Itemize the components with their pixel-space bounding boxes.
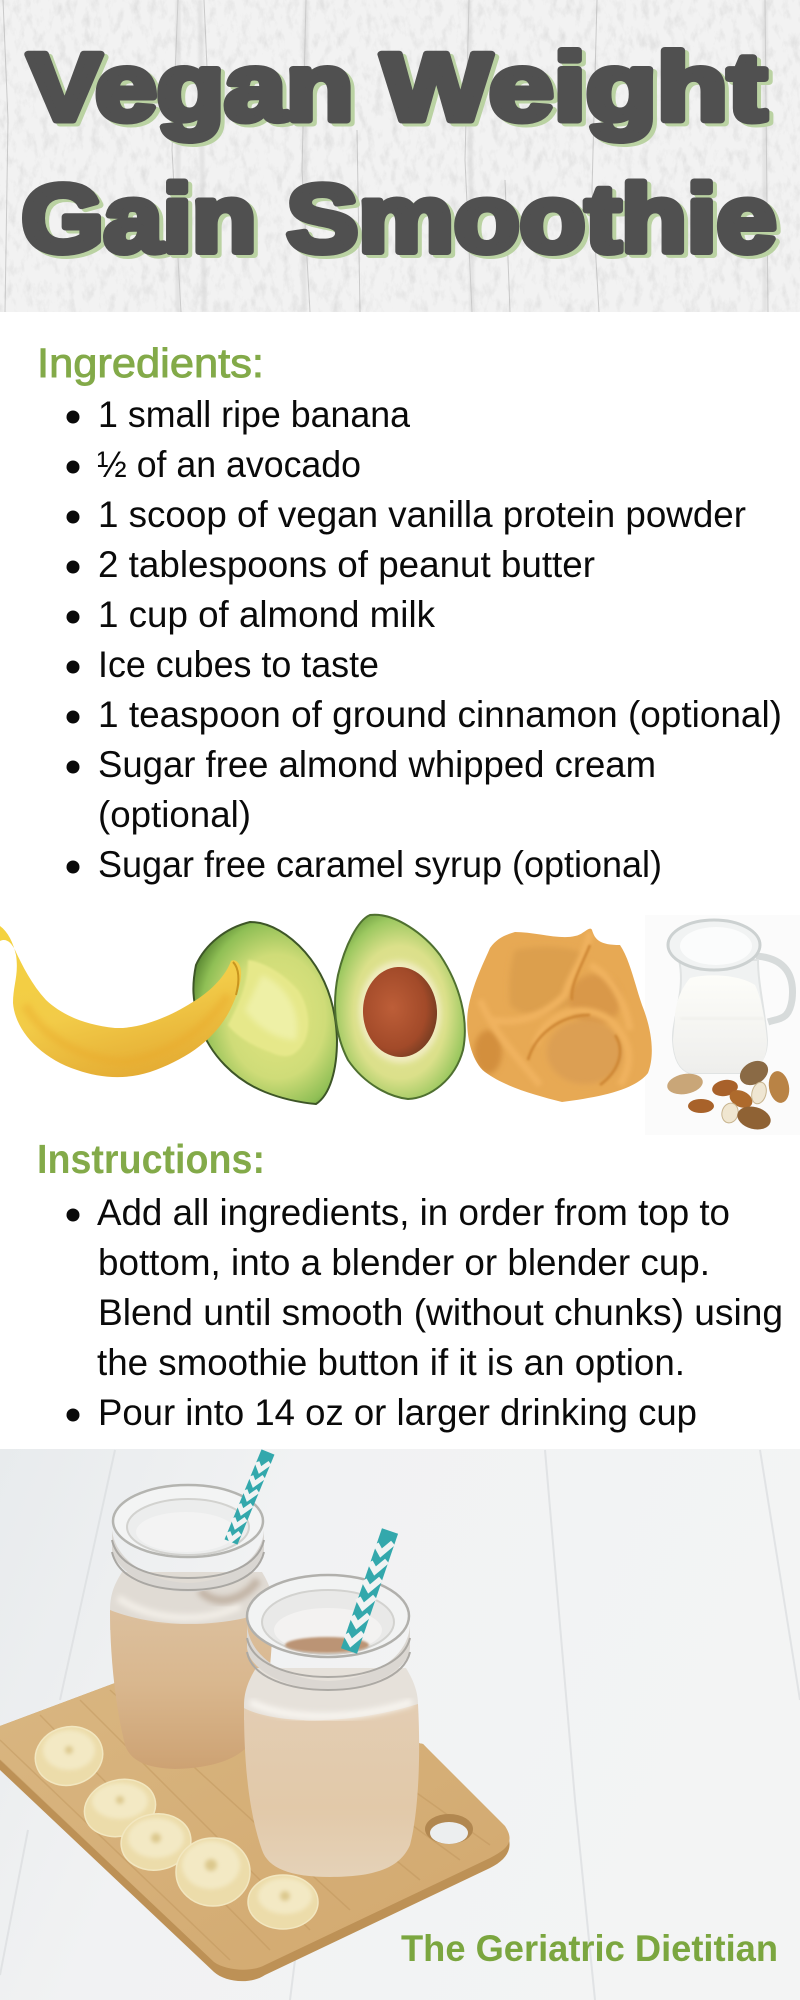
milk <box>673 975 767 1073</box>
title <box>22 34 780 276</box>
front straw <box>346 1531 393 1651</box>
ingredients list: (optional) <box>98 794 251 835</box>
icon: peanut butter <box>467 929 652 1102</box>
title text: Vegan <box>28 34 354 141</box>
instructions list: bottom, into a blender or blender cup. <box>98 1242 710 1283</box>
jug body <box>673 960 767 1073</box>
front jar threads <box>247 1625 410 1690</box>
ingredients list: 1 scoop of vegan vanilla protein powder <box>98 494 746 535</box>
instructions list <box>66 1192 783 1433</box>
ingredients list: 1 cup of almond milk <box>98 594 435 635</box>
back jar rim <box>113 1485 263 1557</box>
panel: smoothie photo <box>0 1449 800 2000</box>
back straw <box>228 1452 270 1542</box>
ingredients list <box>66 394 782 885</box>
title shadow <box>26 37 780 276</box>
panel: ingredient photos <box>0 915 800 1135</box>
title text: Weight <box>382 34 766 141</box>
ingredients list: Sugar free caramel syrup (optional) <box>98 844 662 885</box>
instructions list: Blend until smooth (without chunks) using <box>98 1292 783 1333</box>
title text: Smoothie <box>286 166 776 272</box>
icon: avocado half with hollow <box>193 922 337 1104</box>
back jar threads <box>112 1530 264 1592</box>
front jar glass <box>244 1668 418 1720</box>
panel: title banner with white painted wood <box>0 0 800 312</box>
heading: ingredients: Ingredients: <box>37 340 264 386</box>
title shadow: Vegan <box>32 37 358 144</box>
ingredients list: Sugar free almond whipped cream <box>98 744 656 785</box>
title shadow: Weight <box>386 37 770 144</box>
back jar liquid <box>110 1600 273 1769</box>
title shadow: Smoothie <box>290 168 780 276</box>
ingredients list: 2 tablespoons of peanut butter <box>98 544 595 585</box>
front jar rim <box>247 1575 409 1657</box>
ingredients list: 1 teaspoon of ground cinnamon (optional) <box>98 694 782 735</box>
icon: avocado half with pit <box>335 915 465 1099</box>
instructions list: Pour into 14 oz or larger drinking cup <box>98 1392 697 1433</box>
almonds <box>666 1056 792 1133</box>
heading: instructions: Instructions: <box>37 1136 265 1182</box>
cutting board <box>0 1683 510 1981</box>
instructions list: the smoothie button if it is an option. <box>97 1342 685 1383</box>
back jar <box>110 1452 273 1769</box>
instructions list: Add all ingredients, in order from top to <box>97 1192 730 1233</box>
title text: Gain <box>22 166 256 272</box>
front jar <box>244 1531 419 1877</box>
ingredients list: ½ of an avocado <box>97 444 361 485</box>
board handle hole <box>425 1814 473 1844</box>
jug rim <box>668 920 760 970</box>
title text <box>22 34 776 272</box>
ingredients list: 1 small ripe banana <box>98 394 410 435</box>
jug handle <box>756 956 793 1022</box>
icon: banana <box>0 926 241 1077</box>
front jar liquid <box>244 1704 419 1877</box>
credit: The Geriatric Dietitian <box>401 1928 778 1969</box>
icon: milk jug and almonds <box>645 915 800 1135</box>
title shadow: Gain <box>26 168 260 276</box>
back jar glass <box>110 1572 273 1630</box>
ingredients list: Ice cubes to taste <box>98 644 379 685</box>
banana slices <box>29 1719 318 1929</box>
